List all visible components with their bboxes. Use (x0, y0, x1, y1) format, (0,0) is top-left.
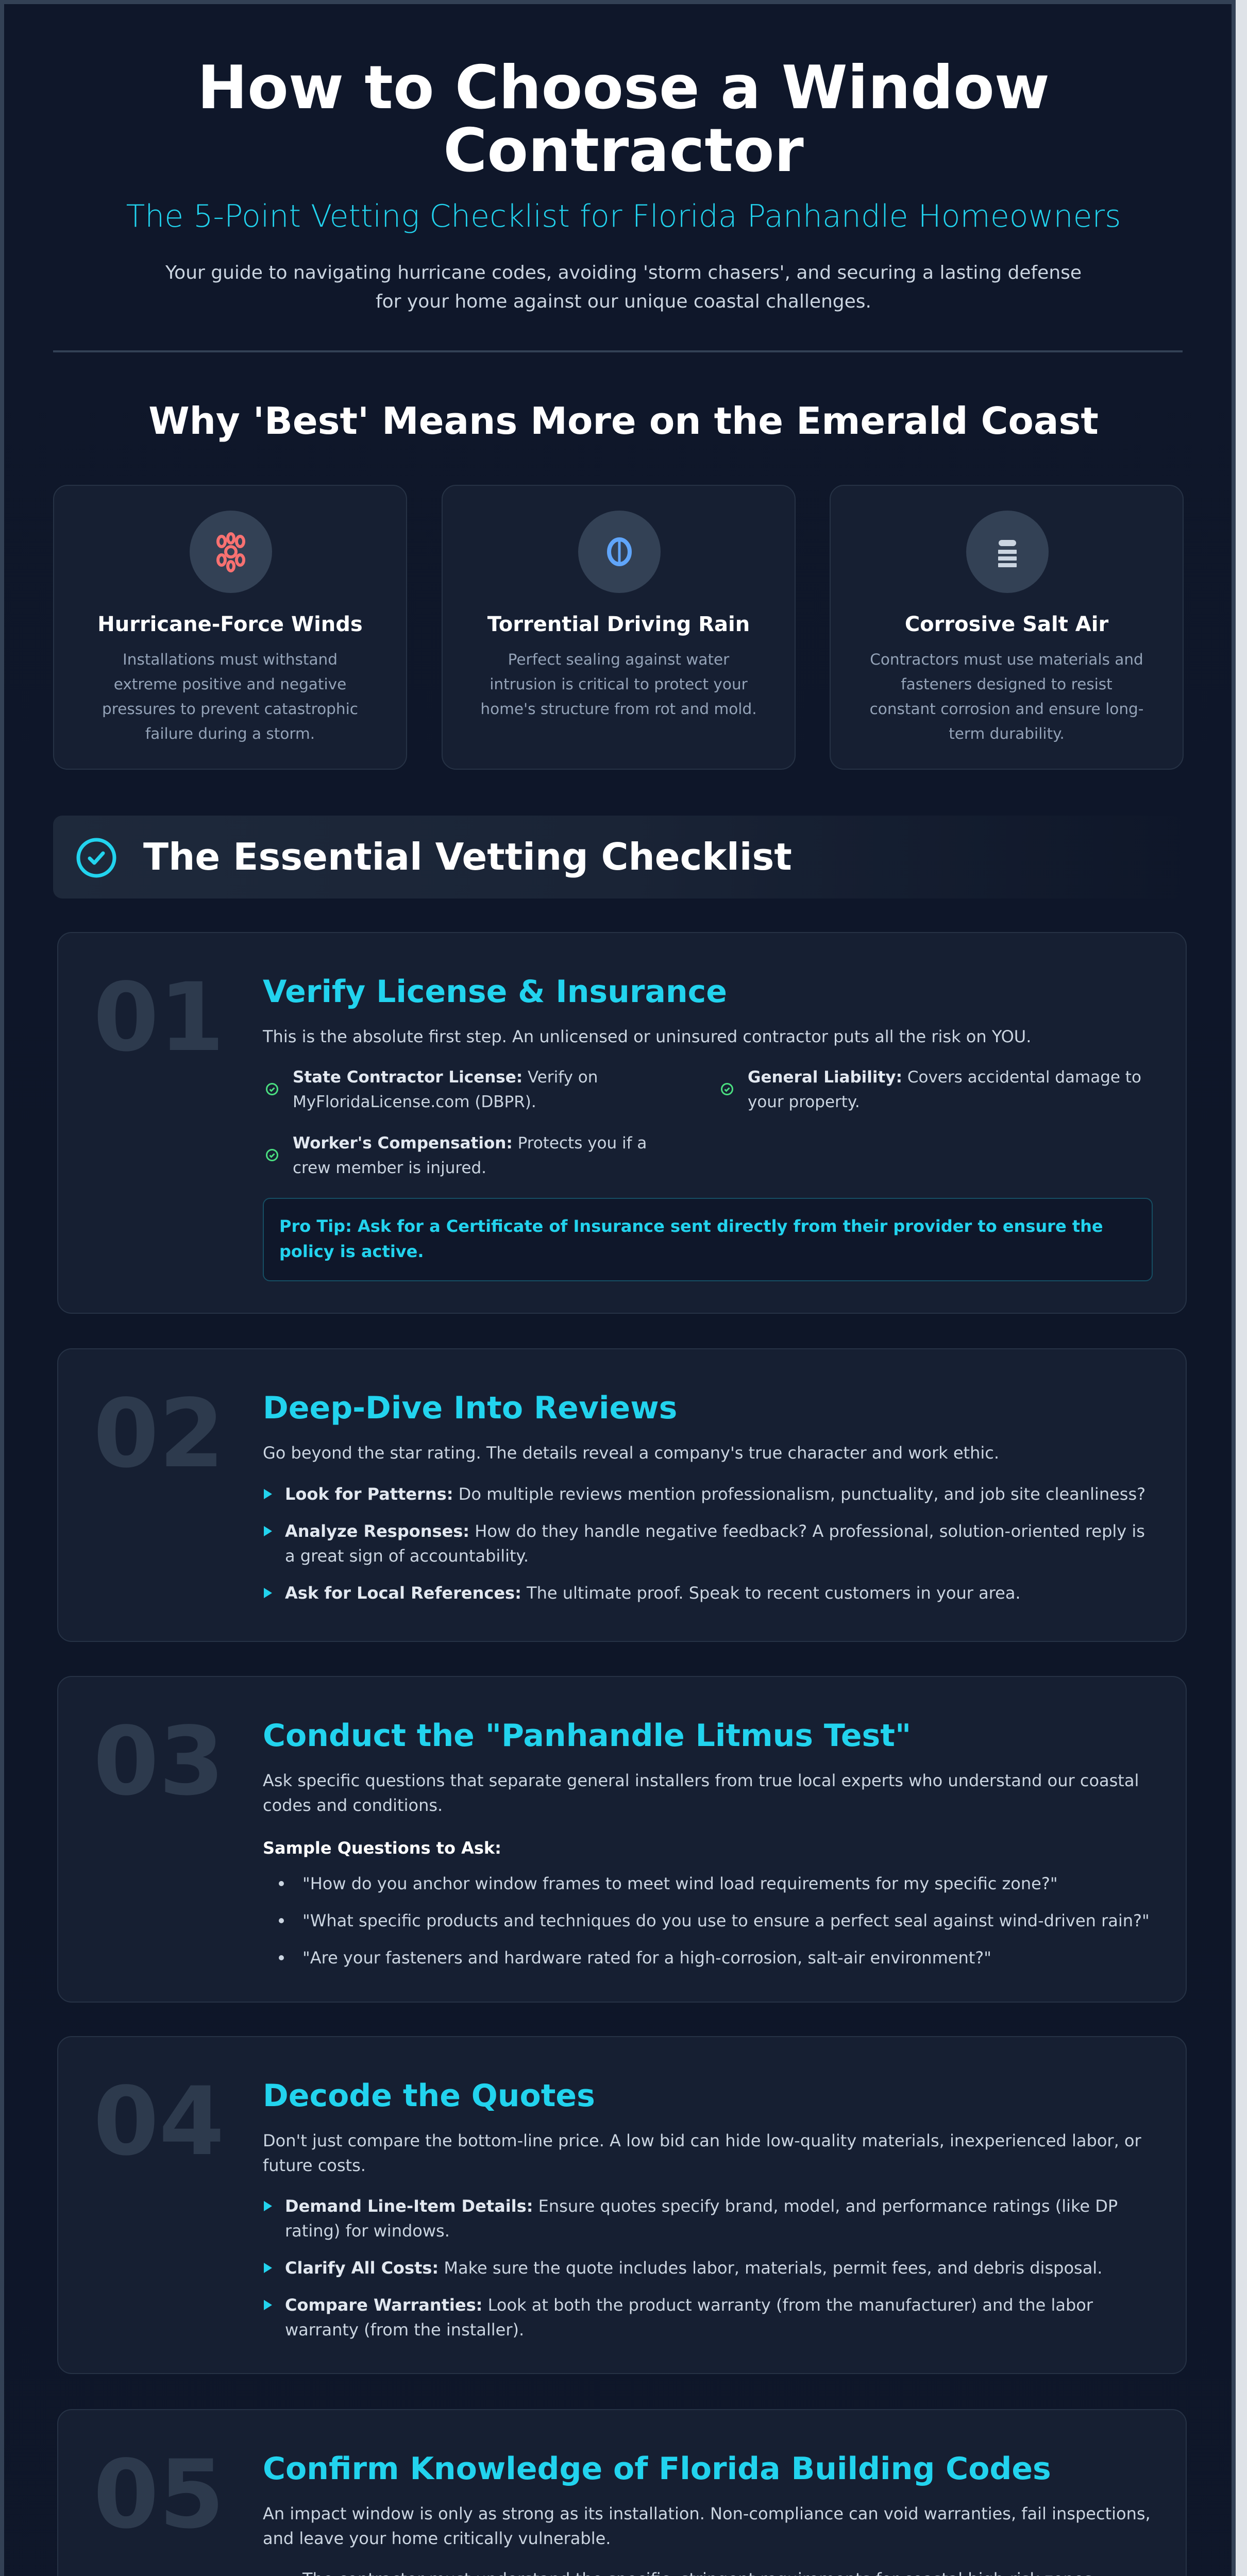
step 04: Decode the Quotes (263, 2078, 595, 2114)
card: hurricane winds: failure during a storm. (145, 725, 315, 742)
card: driving rain: Perfect sealing against water (508, 651, 729, 668)
step 04: 04 (93, 2067, 225, 2177)
step 01: This is the absolute first step. An unlicensed or uninsured contractor puts all the risk on YOU. (263, 1027, 1031, 1046)
intro text: Your guide to navigating hurricane codes, avoiding 'storm chasers', and securing a lasting defense (165, 262, 1082, 283)
card: salt air: Corrosive Salt Air (905, 613, 1108, 636)
step 02: Look for Patterns: Do multiple reviews mention professionalism, punctuality, and job site cleanliness? (285, 1484, 1145, 1504)
callout: pro tip: Pro Tip: Ask for a Certificate of Insurance sent directly from their provider to ensure the policy is active. (279, 1216, 1103, 1261)
step 05 (57, 2409, 1187, 2576)
card: salt air: fasteners designed to resist (901, 675, 1113, 693)
banner: checklist heading: The Essential Vetting Checklist (143, 835, 792, 878)
card: driving rain (442, 485, 796, 770)
step 01 (57, 932, 1187, 1314)
icon: wind (190, 511, 272, 593)
step 02: Deep-Dive Into Reviews (263, 1390, 677, 1426)
checklist items: Worker's Compensation: Protects you if a crew member is injured. (293, 1134, 647, 1177)
card: salt air: term durability. (949, 725, 1065, 742)
icon: check circle (76, 838, 116, 878)
step 03 (57, 1676, 1187, 2003)
subtitle: The 5-Point Vetting Checklist for Florida Panhandle Homeowners (126, 198, 1121, 234)
banner: checklist heading (53, 816, 1183, 899)
step 03: "How do you anchor window frames to meet wind load requirements for my specific zone?" (302, 1874, 1058, 1893)
step 03: "What specific products and techniques do you use to ensure a perfect seal against wind-driven rain?" (302, 1911, 1150, 1930)
card: salt air: Contractors must use materials and (870, 651, 1143, 668)
card: salt air: constant corrosion and ensure long- (870, 700, 1143, 718)
checklist items: General Liability: Covers accidental damage to your property. (748, 1068, 1141, 1111)
step 02: Go beyond the star rating. The details reveal a company's true character and work ethic. (263, 1443, 999, 1463)
checklist items (266, 1068, 1141, 1177)
card: hurricane winds: Installations must withstand (123, 651, 338, 668)
card: hurricane winds: pressures to prevent catastrophic (102, 700, 358, 718)
step 04: Clarify All Costs: Make sure the quote includes labor, materials, permit fees, and debris disposal. (285, 2258, 1102, 2278)
card: driving rain: home's structure from rot and mold. (480, 700, 757, 718)
step 03: Ask specific questions that separate general installers from true local experts who understand our coastal codes and conditions. (263, 1771, 1139, 1815)
step 01: Verify License & Insurance (263, 974, 727, 1010)
card: driving rain: Torrential Driving Rain (487, 613, 750, 636)
step 05: An impact window is only as strong as its installation. Non-compliance can void warranties, fail inspections, and leave your home critically vulnerable. (263, 2504, 1151, 2548)
title: Contractor (443, 116, 804, 185)
heading: why best: Why 'Best' Means More on the Emerald Coast (148, 399, 1099, 443)
step 04: Compare Warranties: Look at both the product warranty (from the manufacturer) and the labor warranty (from the installer). (285, 2295, 1093, 2340)
step 03: "Are your fasteners and hardware rated for a high-corrosion, salt-air environment?" (302, 1948, 991, 1968)
checklist items: State Contractor License: Verify on MyFloridaLicense.com (DBPR). (293, 1068, 598, 1111)
step 02 (57, 1348, 1187, 1642)
card: hurricane winds (53, 485, 407, 770)
step 04: Demand Line-Item Details: Ensure quotes specify brand, model, and performance ratings (like DP rating) for windows. (285, 2196, 1118, 2241)
intro text: for your home against our unique coastal challenges. (376, 291, 871, 312)
icon: salt (966, 511, 1049, 593)
step 02: Analyze Responses: How do they handle negative feedback? A professional, solution-oriented reply is a great sign of accountability. (285, 1521, 1145, 1566)
step 03: 03 (93, 1707, 225, 1817)
step 03: Sample Questions to Ask: (263, 1838, 501, 1858)
step 01: 01 (93, 963, 225, 1073)
title (197, 53, 1050, 185)
card: driving rain: intrusion is critical to protect your (490, 675, 748, 693)
card: hurricane winds: Hurricane-Force Winds (97, 613, 363, 636)
title: How to Choose a Window (197, 53, 1050, 123)
step 04: Don't just compare the bottom-line price. A low bid can hide low-quality materials, inexperienced labor, or future costs. (263, 2131, 1141, 2175)
step 02: Ask for Local References: The ultimate proof. Speak to recent customers in your area. (285, 1583, 1021, 1603)
step 02: 02 (93, 1379, 225, 1489)
icon: rain (578, 511, 661, 593)
callout: pro tip (263, 1198, 1153, 1281)
step 05: Confirm Knowledge of Florida Building Codes (263, 2451, 1051, 2487)
card: salt air (830, 485, 1184, 770)
step 03: Conduct the "Panhandle Litmus Test" (263, 1718, 911, 1754)
card: hurricane winds: extreme positive and negative (114, 675, 346, 693)
step 04 (57, 2036, 1187, 2374)
step 05: 05 (93, 2440, 225, 2550)
intro text (165, 262, 1082, 312)
